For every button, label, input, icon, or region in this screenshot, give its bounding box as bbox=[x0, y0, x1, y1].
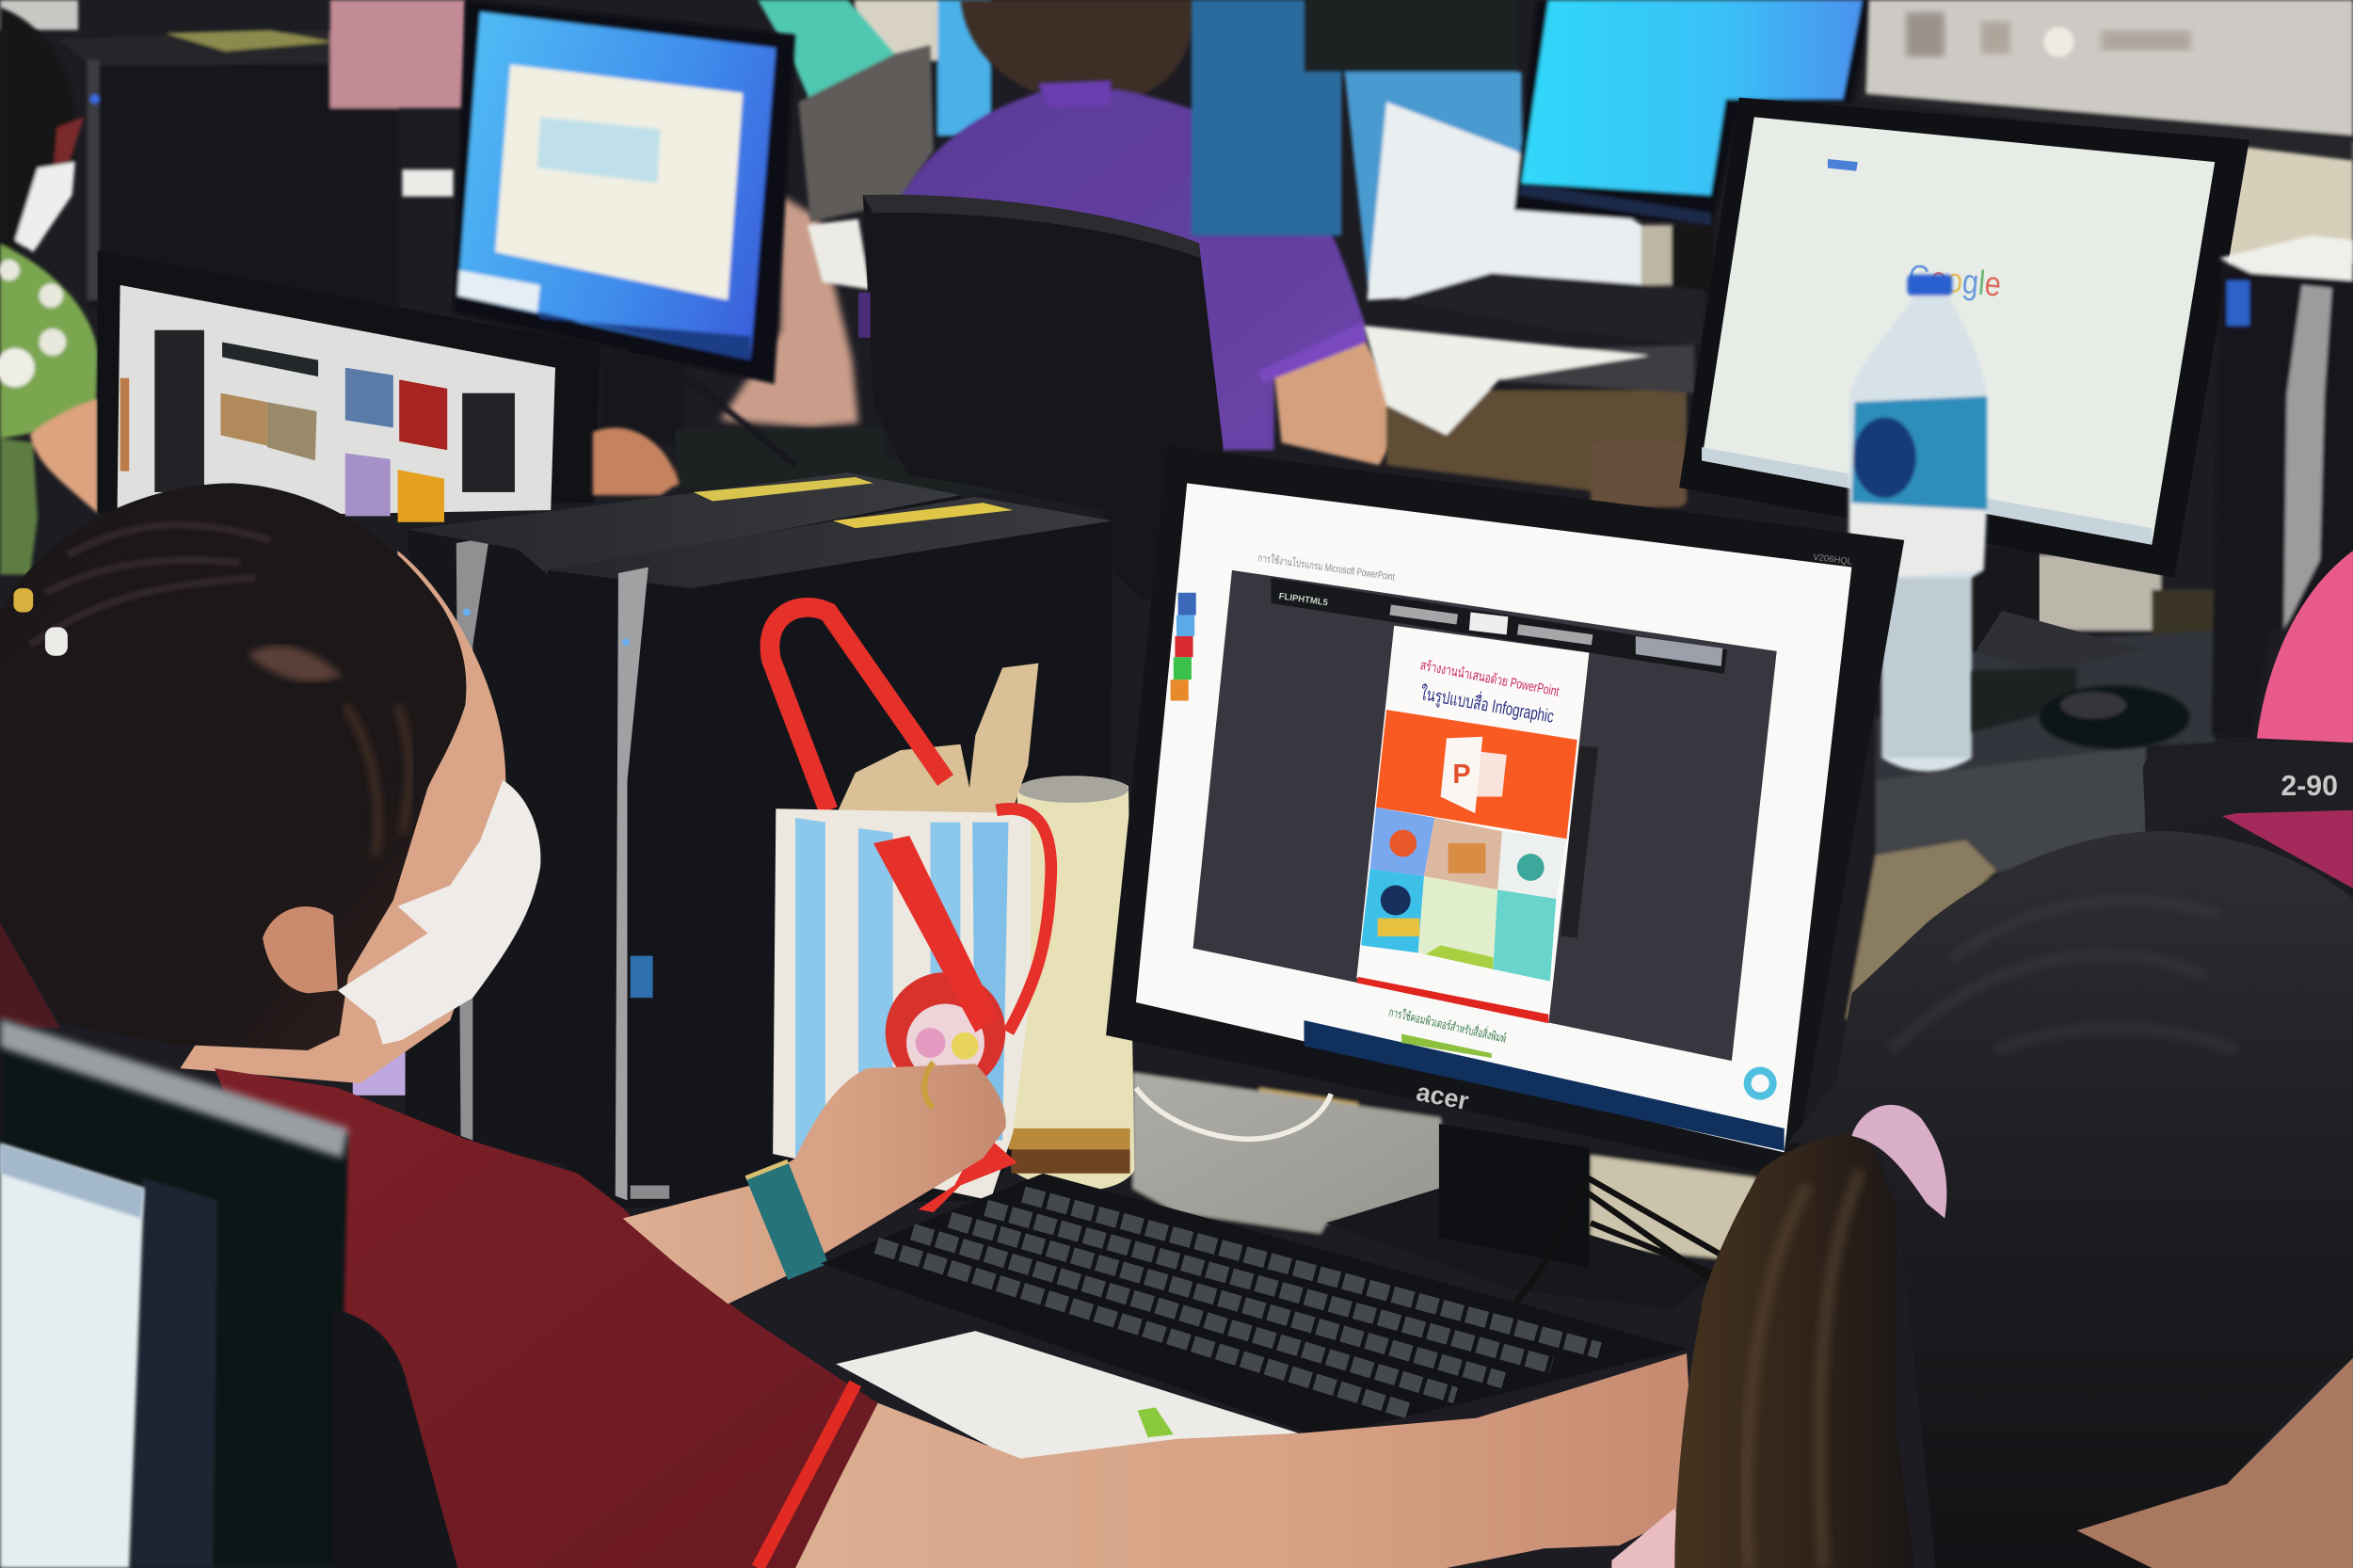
chair label: 2-90 bbox=[2281, 771, 2338, 802]
background tower top left bbox=[0, 0, 465, 308]
black computer towers bbox=[353, 472, 1112, 1208]
pen on the paper bbox=[1138, 1407, 1174, 1437]
bottom-left foreground monitor bbox=[0, 1019, 348, 1568]
keyboard keys bbox=[876, 1194, 1600, 1411]
poster red footer bbox=[1356, 977, 1548, 1023]
bottom-left woman: hair bbox=[0, 483, 466, 1050]
ponytail bbox=[1674, 1133, 1914, 1568]
person in pink at right edge bbox=[2257, 551, 2353, 743]
long outstretched arm and hand bbox=[795, 1353, 1696, 1568]
viewer dark area bbox=[1193, 570, 1777, 1061]
large projection screen at top right bbox=[1861, 0, 2353, 161]
striped tote bag bbox=[773, 808, 1051, 1212]
black office chair bbox=[858, 195, 1223, 600]
poster orange band bbox=[1376, 710, 1577, 839]
badge on tote bbox=[886, 972, 1005, 1093]
central monitor bbox=[1106, 445, 1904, 1179]
side toolbar bbox=[1561, 745, 1598, 937]
white face mask bbox=[338, 780, 540, 1045]
hair on head bbox=[1787, 831, 2353, 1568]
poster heading: สร้างงานนำเสนอด้วย PowerPoint bbox=[1419, 658, 1561, 700]
hair streaks bbox=[1891, 901, 2236, 1050]
poster in viewer bbox=[1356, 626, 1589, 1023]
cream tumbler bbox=[1008, 776, 1134, 1191]
scrunchie bbox=[1851, 1105, 1946, 1219]
PowerPoint icon bbox=[1441, 737, 1507, 813]
foreground person bbox=[1674, 831, 2353, 1568]
thumbnail grid bbox=[1361, 808, 1567, 982]
background monitor with photo gallery bbox=[98, 250, 600, 522]
poster subheading: ในรูปแบบสื่อ Infographic bbox=[1418, 680, 1556, 728]
background monitor with blue desktop bbox=[454, 0, 795, 442]
background person's hand and desk bbox=[593, 376, 1050, 495]
paper on the desk bbox=[836, 1331, 1298, 1463]
share buttons bbox=[1171, 593, 1196, 701]
right desk keyboard and mouse bbox=[1972, 667, 2189, 749]
PowerPoint icon: P bbox=[1452, 760, 1470, 790]
windows taskbar bbox=[1305, 1020, 1785, 1151]
Google logo text: Google bbox=[1907, 257, 2003, 304]
viewer toolbar: FLIPHTML5 bbox=[1278, 591, 1329, 608]
person in purple shirt from behind bbox=[901, 0, 1394, 465]
tower on the right with paper on top bbox=[2212, 235, 2353, 735]
foreground chair bbox=[333, 1308, 457, 1568]
forearm, hand and watch bbox=[623, 1063, 1006, 1304]
caption below the viewer: การใช้คอมพิวเตอร์สำหรับสื่อสิ่งพิมพ์ bbox=[1387, 1004, 1508, 1046]
browser page text: การใช้งานโปรแกรม Microsoft PowerPoint bbox=[1257, 551, 1396, 584]
background teal item, backpack and papers bbox=[402, 0, 934, 290]
background monitor showing Google page bbox=[1679, 98, 2249, 671]
chat button bbox=[1744, 1067, 1777, 1100]
background person in pink-beige sleeve behind monitor bbox=[720, 195, 858, 427]
chair with label 2-90 and pink mesh bbox=[2143, 742, 2353, 888]
background monitors, papers and keyboard at top centre bbox=[1192, 0, 1874, 507]
viewer toolbar bbox=[1271, 578, 1727, 674]
model label: V206HQL bbox=[1813, 552, 1853, 568]
ponytail highlights bbox=[1746, 1171, 1861, 1568]
woman's face bbox=[180, 551, 505, 1083]
black keyboard bbox=[821, 1174, 1687, 1437]
green download button bbox=[1401, 1033, 1492, 1058]
ear and neck bbox=[263, 906, 338, 993]
brand label on the monitor: acer bbox=[1414, 1077, 1471, 1115]
person top left with mask and green dotted shirt bbox=[0, 8, 98, 575]
neck skin bbox=[2077, 1358, 2353, 1568]
snack bag in tote bbox=[830, 664, 1038, 843]
water bottle bbox=[1849, 275, 1987, 771]
tote straps bbox=[873, 808, 1051, 1212]
pink garment at bottom bbox=[1611, 1508, 1689, 1568]
red tote handle behind bbox=[770, 607, 945, 810]
monitor stand, white cable and black cables bbox=[1136, 1088, 1725, 1308]
woman's maroon shirt bbox=[215, 1068, 878, 1568]
